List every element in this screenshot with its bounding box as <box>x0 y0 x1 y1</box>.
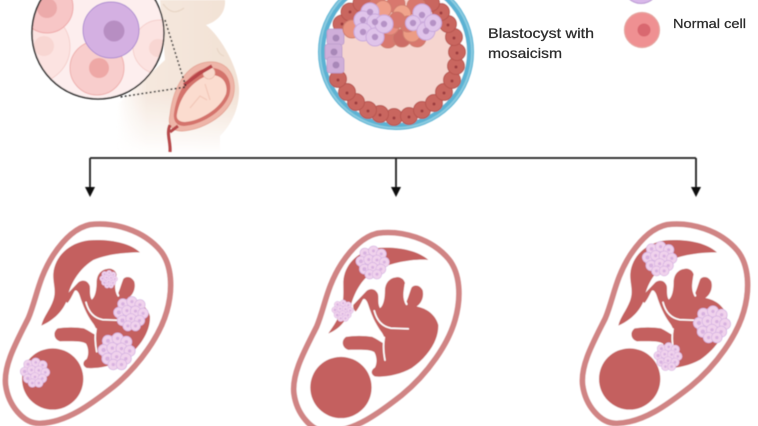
fetus 2 with placental clusters <box>294 233 459 426</box>
uterus <box>168 62 234 152</box>
label: second line: mosaicism <box>488 45 562 61</box>
branching arrows <box>85 158 701 197</box>
magnified cells circle <box>30 0 166 101</box>
placenta 2 <box>328 248 428 333</box>
fetus 1 with mosaic clusters <box>5 224 171 423</box>
mosaic purple cells <box>354 3 442 46</box>
fetus 3 with mixed clusters <box>582 224 748 423</box>
body silhouette <box>124 0 240 142</box>
belly marks <box>163 4 224 56</box>
fetus inside uterus <box>177 75 227 122</box>
label: normal cell: Normal cell <box>673 17 746 31</box>
legend: normal cell <box>624 12 660 48</box>
purple wall cells <box>325 29 344 73</box>
inner cell mass <box>343 0 426 48</box>
legend: mosaic cell <box>624 0 658 4</box>
pregnant body illustration <box>116 0 239 155</box>
cervix <box>168 125 178 152</box>
blastocyst with mosaicism <box>320 0 472 128</box>
trophectoderm cells <box>330 0 466 126</box>
label: blastocyst with mosaicism: Blastocyst with <box>488 25 594 41</box>
placenta 3 <box>618 240 717 326</box>
dotted zoom lines <box>120 20 186 97</box>
placenta 1 <box>41 240 140 326</box>
